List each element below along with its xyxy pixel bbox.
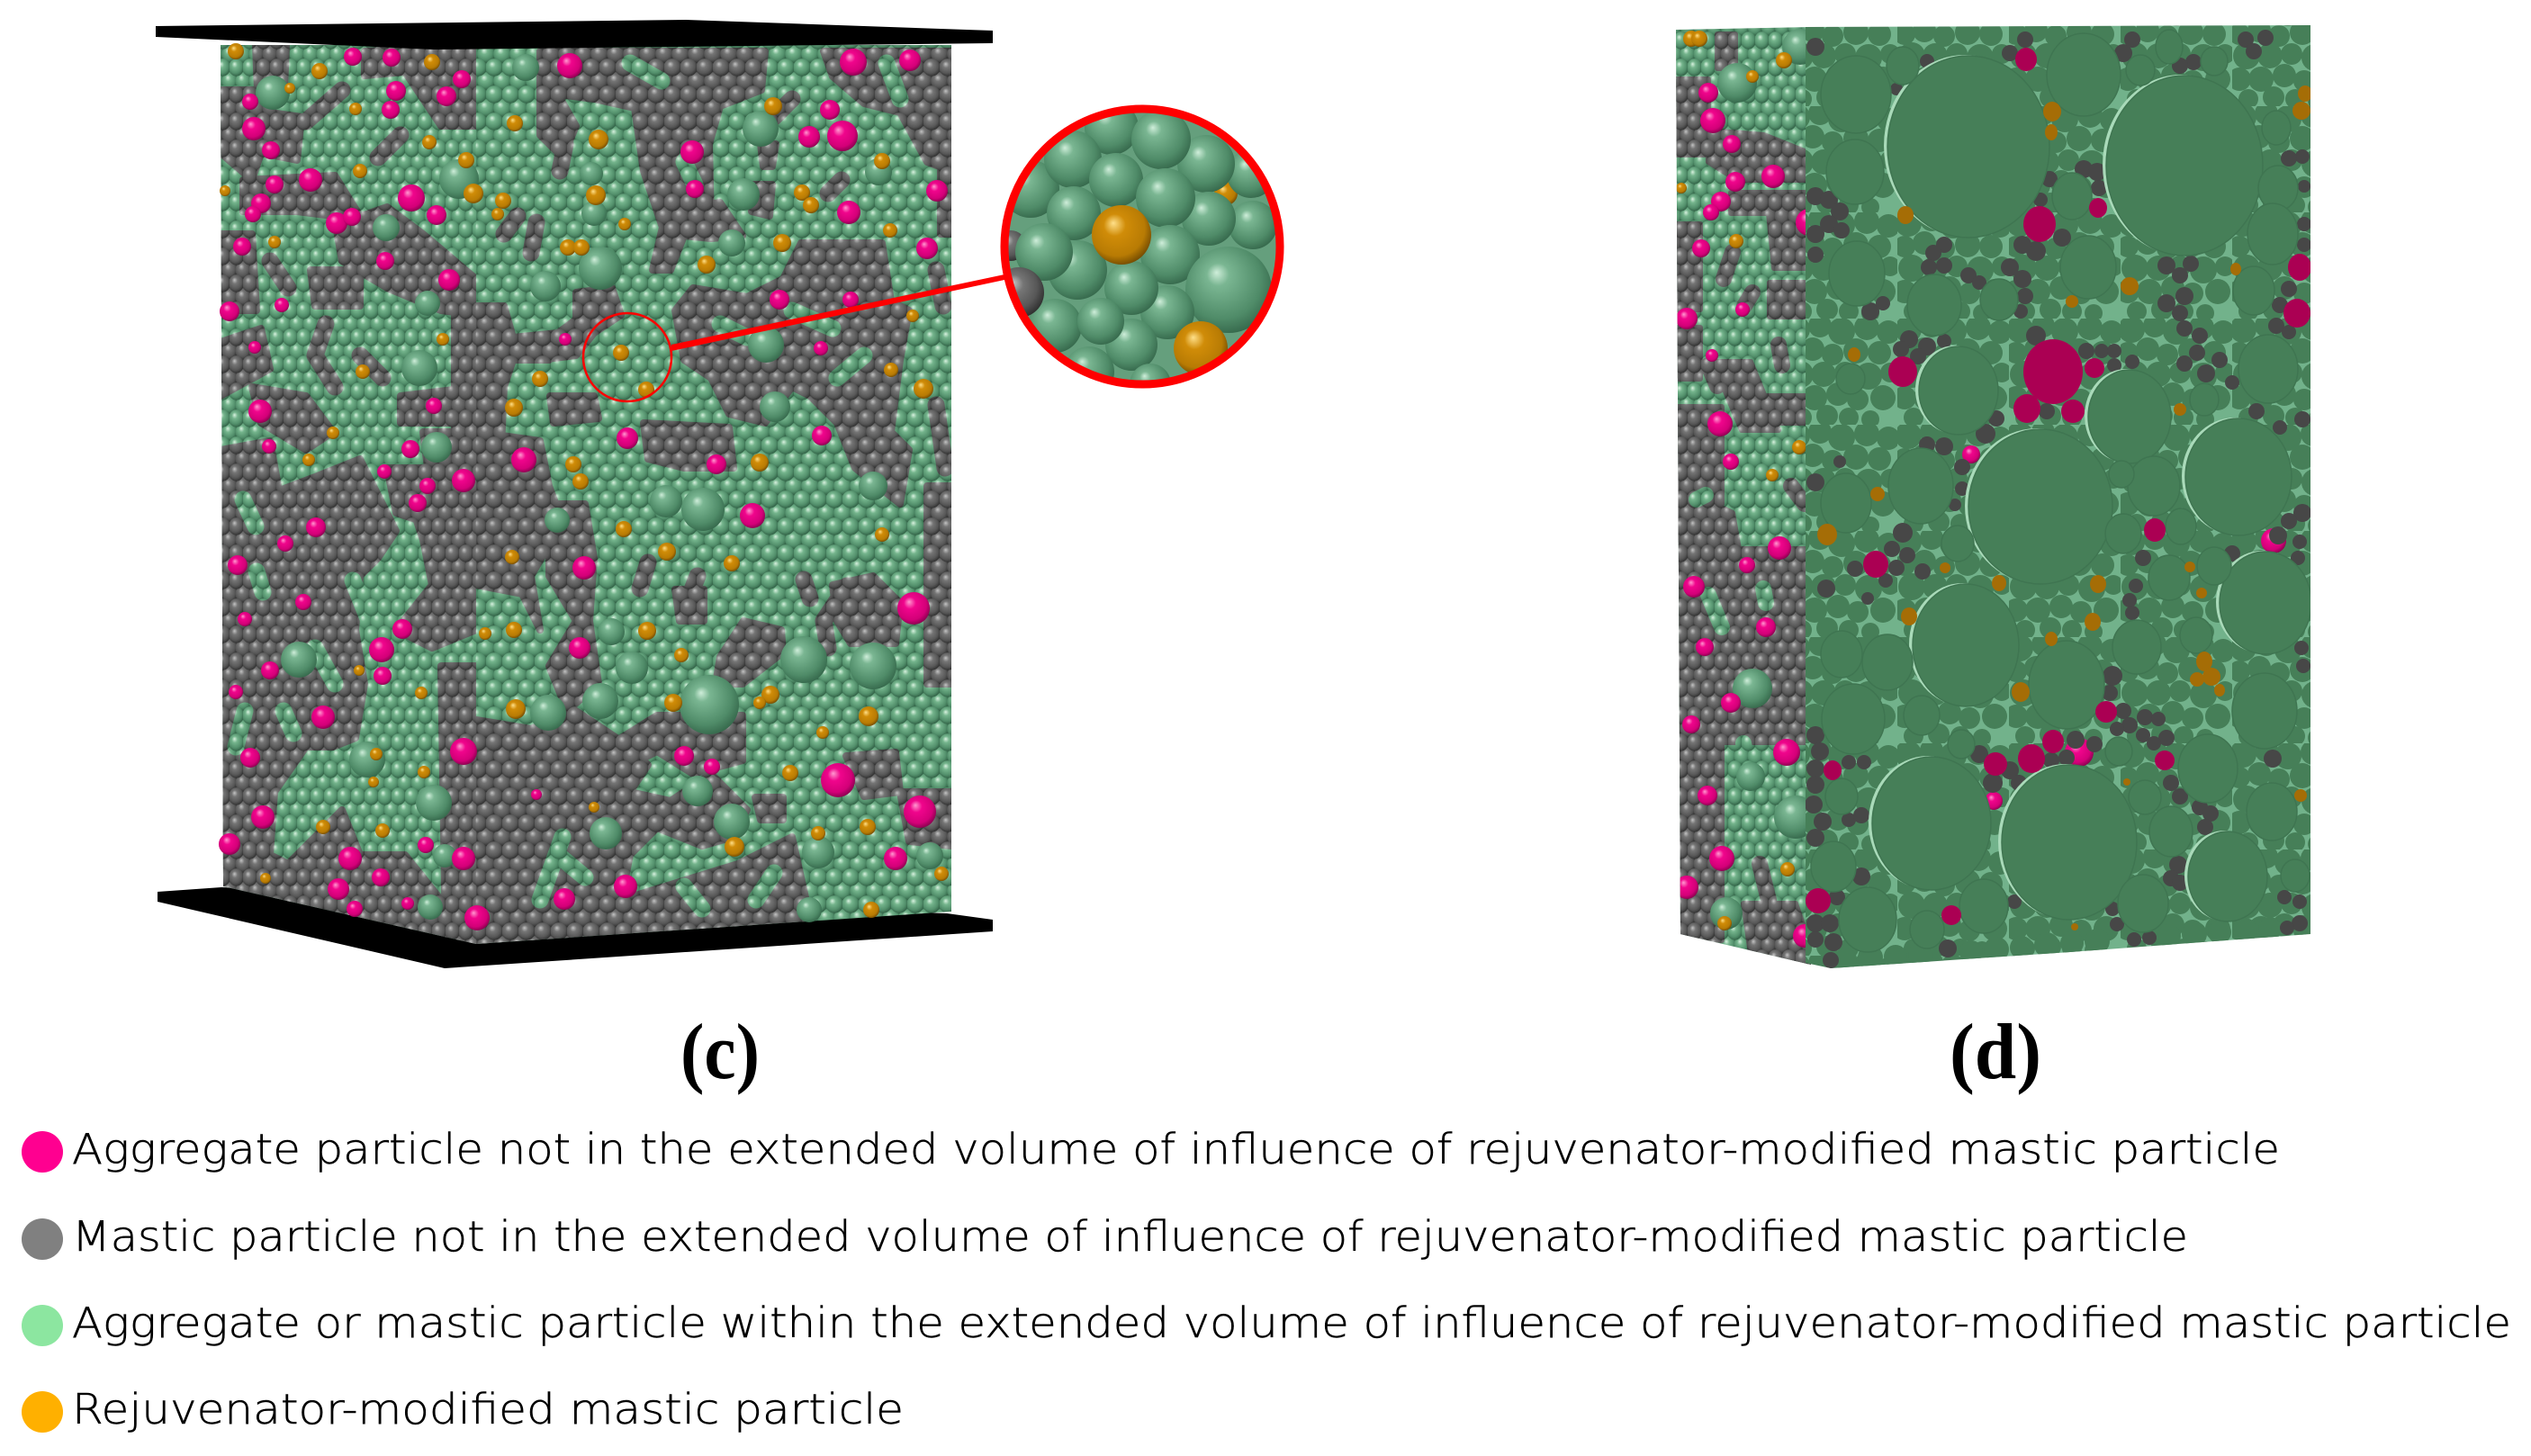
bottom loading plate (158, 887, 993, 968)
callout: magnified view of particles (583, 101, 1284, 405)
large aggregate particles in influence zone (256, 54, 943, 922)
legend swatch: within influence volume (22, 1305, 63, 1346)
discs along the bottom edge of cut face (1833, 915, 2312, 971)
magenta aggregate discs on cut face (1806, 48, 2311, 925)
panel label (c): (c) (680, 1009, 760, 1096)
rejuvenator-modified mastic particles (orange) (220, 43, 949, 918)
legend text: mastic not in influence volume: Mastic particle not in the extended volume of influence of rejuvenator-modified mastic particle (72, 1212, 2188, 1261)
left face of particle assembly (221, 36, 482, 954)
legend text: rejuvenator-modified mastic: Rejuvenator-modified mastic particle (72, 1385, 904, 1434)
large aggregate discs on cut face (dark green) (1811, 30, 2311, 952)
legend swatch: aggregate not in influence volume (22, 1131, 63, 1173)
right face of particle assembly (473, 36, 959, 954)
legend swatch: rejuvenator-modified mastic (22, 1391, 63, 1433)
magenta spheres on left face (1678, 83, 1806, 948)
panel label (d): (d) (1950, 1009, 2041, 1096)
left face particles (1676, 29, 1806, 948)
legend (22, 1125, 2511, 1434)
top loading plate (156, 20, 993, 49)
lens red ring (1004, 109, 1280, 384)
legend text: aggregate not in influence volume: Aggregate particle not in the extended volume of influence of rejuvenator-modified mastic particle (72, 1125, 2280, 1173)
small red selection circle (583, 313, 671, 401)
legend swatch: mastic not in influence volume (22, 1218, 63, 1260)
orange spheres on left face (1676, 31, 1806, 930)
light crescents behind the largest aggregates (1869, 55, 2308, 921)
cut face of specimen (1805, 22, 2318, 976)
mastic discs on cut face (dark grey) (1805, 30, 2311, 968)
aggregate particles outside influence volume (magenta) (219, 48, 948, 930)
orange mastic discs on cut face (1817, 85, 2312, 930)
panel: specimen c (156, 20, 993, 968)
legend text: within influence volume: Aggregate or mastic particle within the extended volume of influence of rejuvenator-modified mastic particle (72, 1299, 2511, 1347)
partly hidden magenta spheres (1962, 445, 2286, 810)
panel: specimen d (1670, 22, 2318, 976)
left face of cut specimen (1676, 27, 1811, 965)
magnified lens with spheres (1008, 113, 1276, 380)
red leader line (671, 274, 1004, 351)
large influence-zone spheres on left face (1710, 29, 1806, 930)
